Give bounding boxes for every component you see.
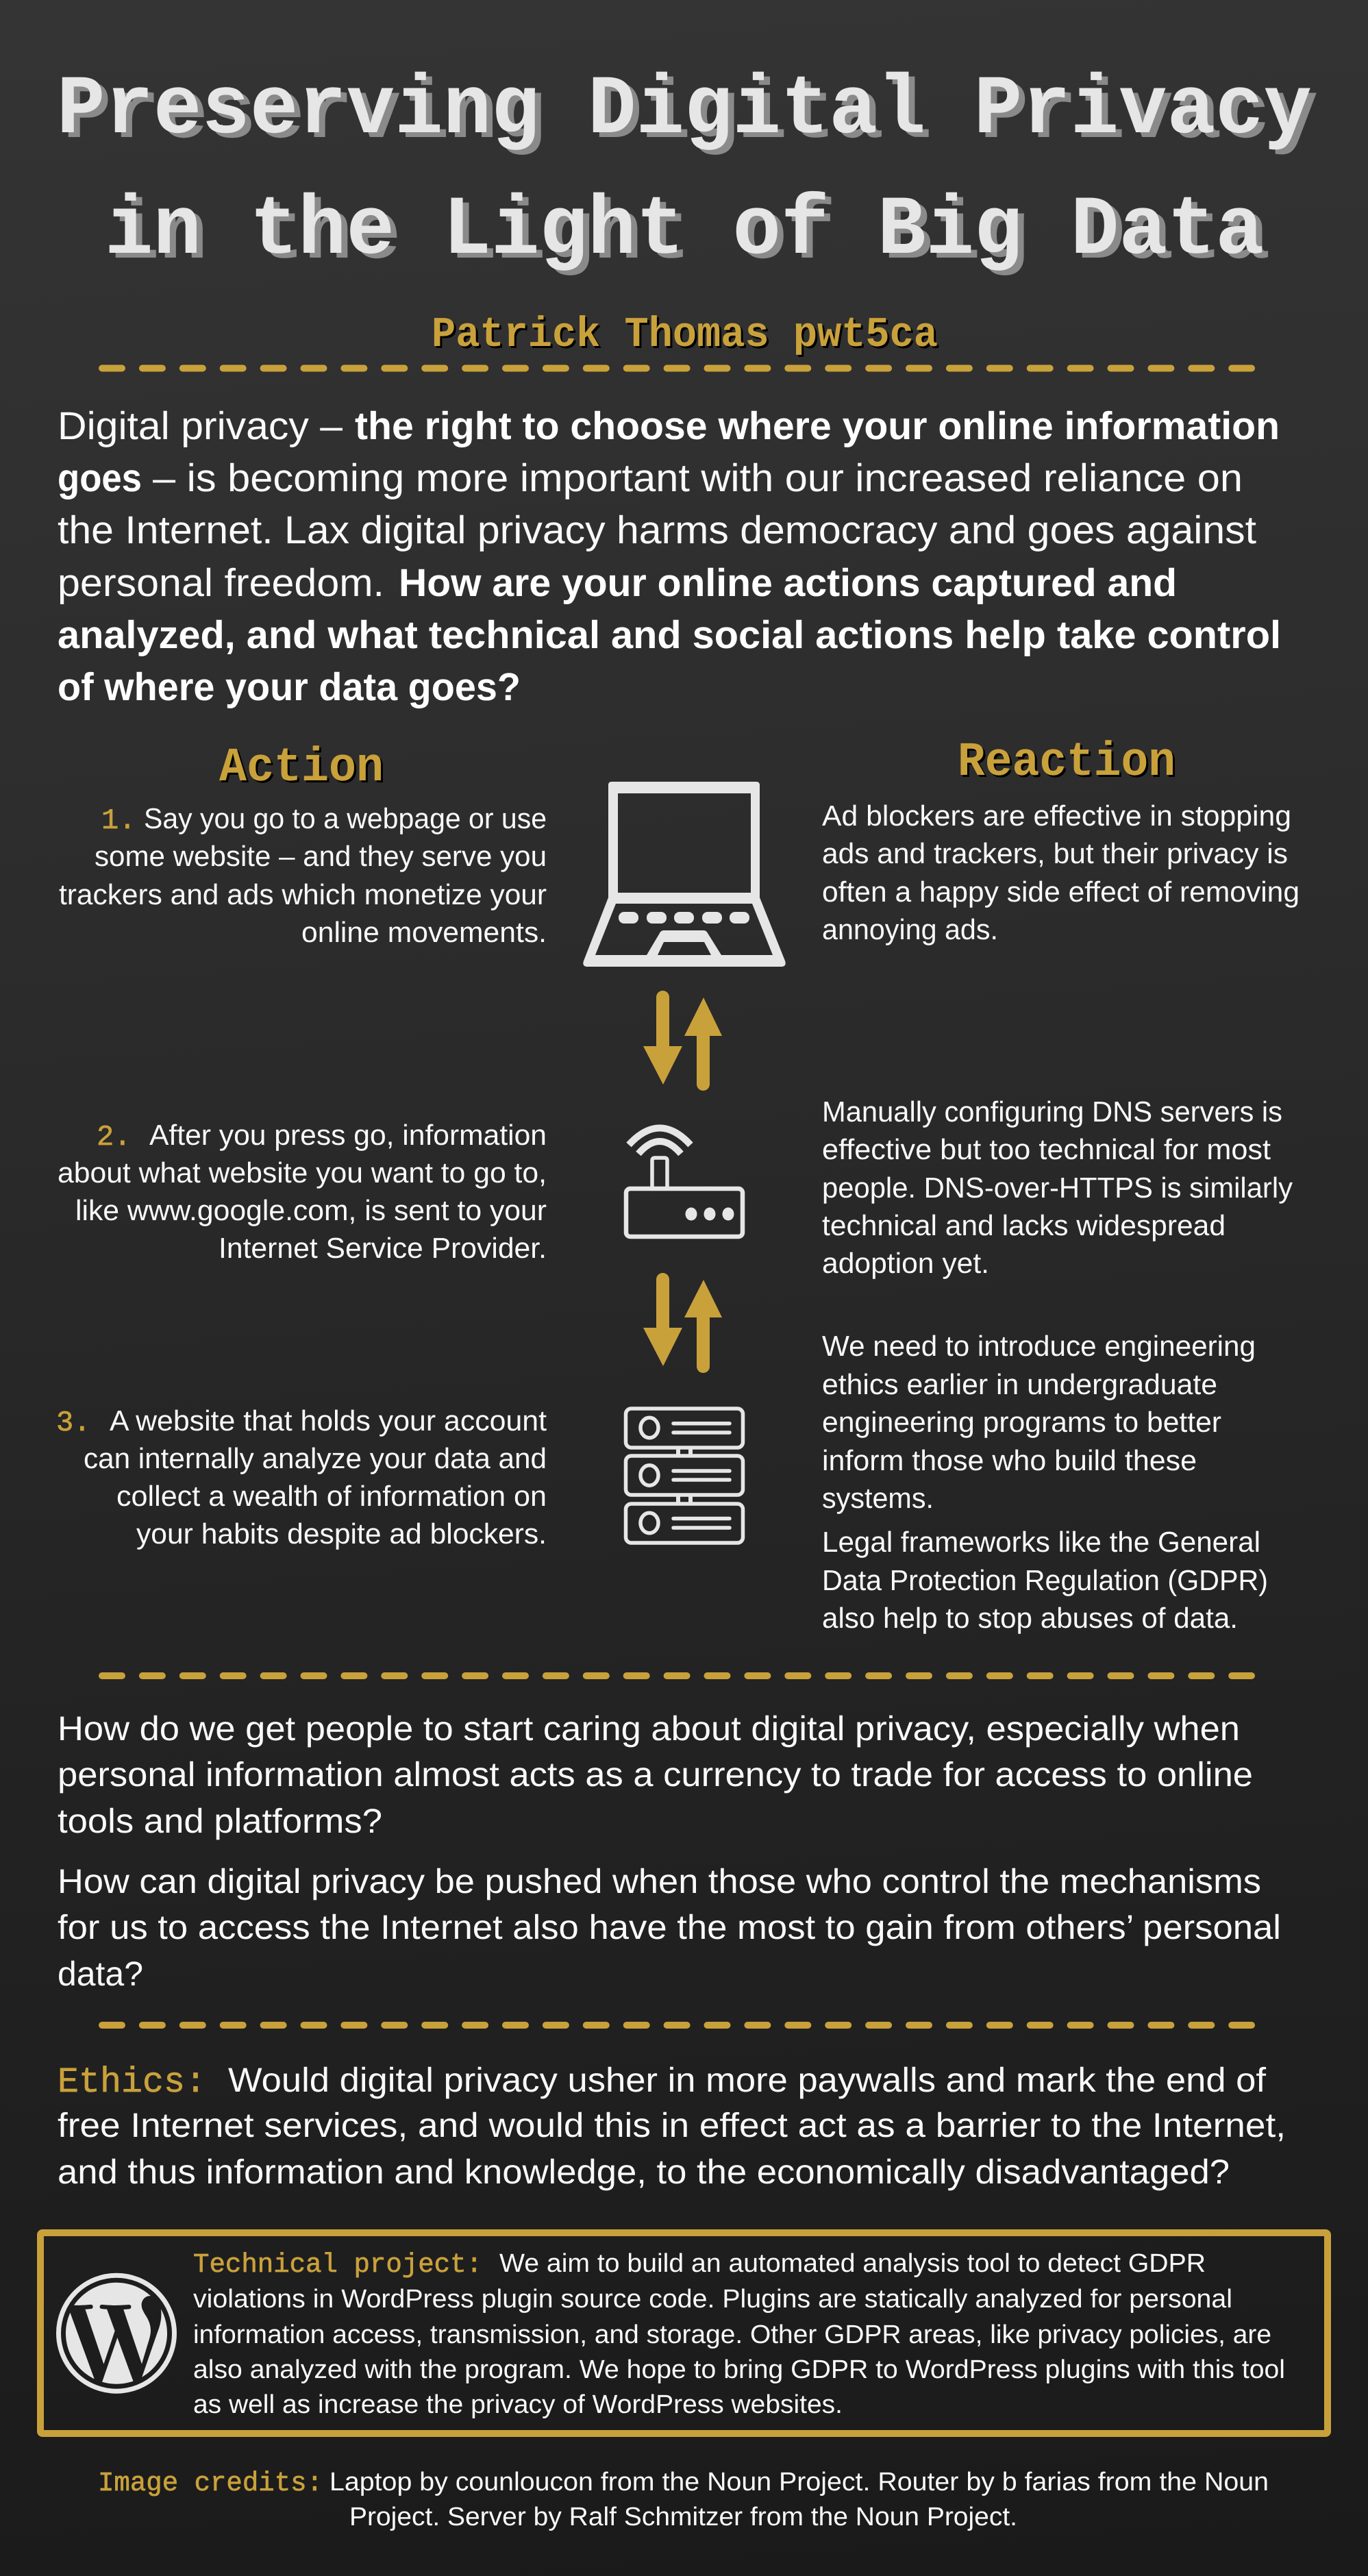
question 1: personal information almost acts as a currency to trade for access to online [58,1755,1253,1794]
action step 2: like www.google.com, is sent to your [75,1194,547,1226]
reaction 1: annoying ads. [822,913,998,945]
action step 3 [56,1404,547,1550]
reaction 1: often a happy side effect of removing [822,876,1299,908]
technical project text: information access, transmission, and storage. Other GDPR areas, like privacy policies, are [193,2320,1271,2349]
intro paragraph: analyzed, and what technical and social actions help take control [58,613,1281,657]
title [57,62,1312,278]
technical project text [193,2249,1285,2419]
intro paragraph: the right to choose where your online information [355,404,1280,448]
action step 1: trackers and ads which monetize your [59,878,547,911]
ethics paragraph [58,2061,1286,2191]
intro paragraph: – is becoming more important with our increased reliance on [153,456,1243,500]
reaction 4: legal frameworks [822,1526,1268,1634]
question 1: How do we get people to start caring about digital privacy, especially when [58,1709,1240,1748]
intro paragraph: How are your online actions captured and [399,561,1177,605]
technical project text: as well as increase the privacy of WordPress websites. [193,2390,843,2419]
intro paragraph [58,404,1281,709]
action step 3: collect a wealth of information on [116,1480,547,1512]
question 2: for us to access the Internet also have the most to gain from others’ personal [58,1908,1281,1946]
reaction 3: engineering ethics: ethics earlier in undergraduate [822,1368,1217,1400]
ethics paragraph: Ethics: [58,2062,206,2103]
technical project text: violations in WordPress plugin source code. Plugins are statically analyzed for personal [193,2285,1232,2314]
reaction 1: Ad blockers are effective in stopping [822,800,1291,832]
question 2: How can digital privacy be pushed when those who control the mechanisms [58,1862,1261,1900]
question 1 [58,1709,1253,1840]
icon: server [626,1409,743,1543]
author: Patrick Thomas pwt5ca [432,310,938,359]
image credits: Image credits: [98,2468,323,2499]
reaction 2: Manually configuring DNS servers is [822,1095,1282,1128]
action step 2: Internet Service Provider. [219,1232,547,1264]
question 2: data? [58,1955,143,1993]
reaction 3: engineering ethics: systems. [822,1482,934,1514]
reaction 4: legal frameworks: Legal frameworks like the General [822,1526,1260,1558]
reaction 4: legal frameworks: also help to stop abuses of data. [822,1602,1238,1634]
intro paragraph: the Internet. Lax digital privacy harms democracy and goes against [58,508,1256,552]
reaction 1: ads and trackers, but their privacy is [822,837,1288,869]
action step 1 [59,802,547,948]
action step 2: about what website you want to go to, [58,1156,547,1189]
reaction 2: technical and lacks widespread [822,1209,1226,1241]
reaction 3: engineering ethics: We need to introduce engineering [822,1330,1256,1362]
action step 1: online movements. [301,916,547,948]
ethics paragraph: Would digital privacy usher in more paywalls and mark the end of [228,2061,1266,2099]
action step 1: some website – and they serve you [95,840,547,872]
title: Preserving Digital Privacy [57,62,1312,158]
action step 1: 1. [101,804,136,837]
arrows between router and server [643,1273,722,1373]
reaction 2: adoption yet. [822,1247,989,1279]
question 1: tools and platforms? [58,1802,382,1840]
technical project text: Technical project: [193,2249,482,2280]
action step 2 [58,1119,547,1264]
reaction 1 [822,800,1299,945]
image credits: Project. Server by Ralf Schmitzer from the Noun Project. [349,2503,1017,2531]
reaction 2 [822,1095,1293,1279]
action step 2: 2. [97,1121,131,1154]
panel: technical project [40,2233,1328,2433]
reaction 4: legal frameworks: Data Protection Regulation (GDPR) [822,1564,1268,1596]
action step 2: After you press go, information [149,1119,547,1151]
action step 3: 3. [56,1407,90,1439]
action step 3: your habits despite ad blockers. [136,1518,547,1550]
reaction 2: people. DNS-over-HTTPS is similarly [822,1172,1293,1204]
arrows between laptop and router [643,991,722,1091]
image credits [98,2468,1269,2531]
title: in the Light of Big Data [105,183,1264,278]
question 2 [58,1862,1281,1993]
reaction 3: engineering ethics: inform those who build these [822,1444,1197,1476]
action step 3: can internally analyze your data and [84,1442,547,1474]
action step 1: Say you go to a webpage or use [144,802,547,834]
intro paragraph: personal freedom. [58,561,384,605]
action step 3: A website that holds your account [110,1404,547,1437]
intro paragraph: Digital privacy – [58,404,343,448]
icon: router [626,1128,743,1237]
ethics paragraph: free Internet services, and would this in effect act as a barrier to the Internet, [58,2106,1286,2144]
ethics paragraph: and thus information and knowledge, to the economically disadvantaged? [58,2153,1230,2191]
technical project text: We aim to build an automated analysis tool to detect GDPR [499,2249,1206,2278]
icon: wordpress logo [59,2275,174,2391]
intro paragraph: goes [58,456,142,500]
technical project text: also analyzed with the program. We hope to bring GDPR to WordPress plugins with this tool [193,2355,1285,2384]
reaction 3: engineering ethics [822,1330,1256,1514]
icon: laptop [583,782,786,967]
reaction 3: engineering ethics: engineering programs to better [822,1406,1221,1438]
image credits: Laptop by counloucon from the Noun Project. Router by b farias from the Noun [329,2468,1269,2497]
intro paragraph: of where your data goes? [58,665,521,709]
heading: reaction: Reaction [958,736,1176,790]
heading: action: Action [219,741,384,795]
reaction 2: effective but too technical for most [822,1133,1271,1165]
